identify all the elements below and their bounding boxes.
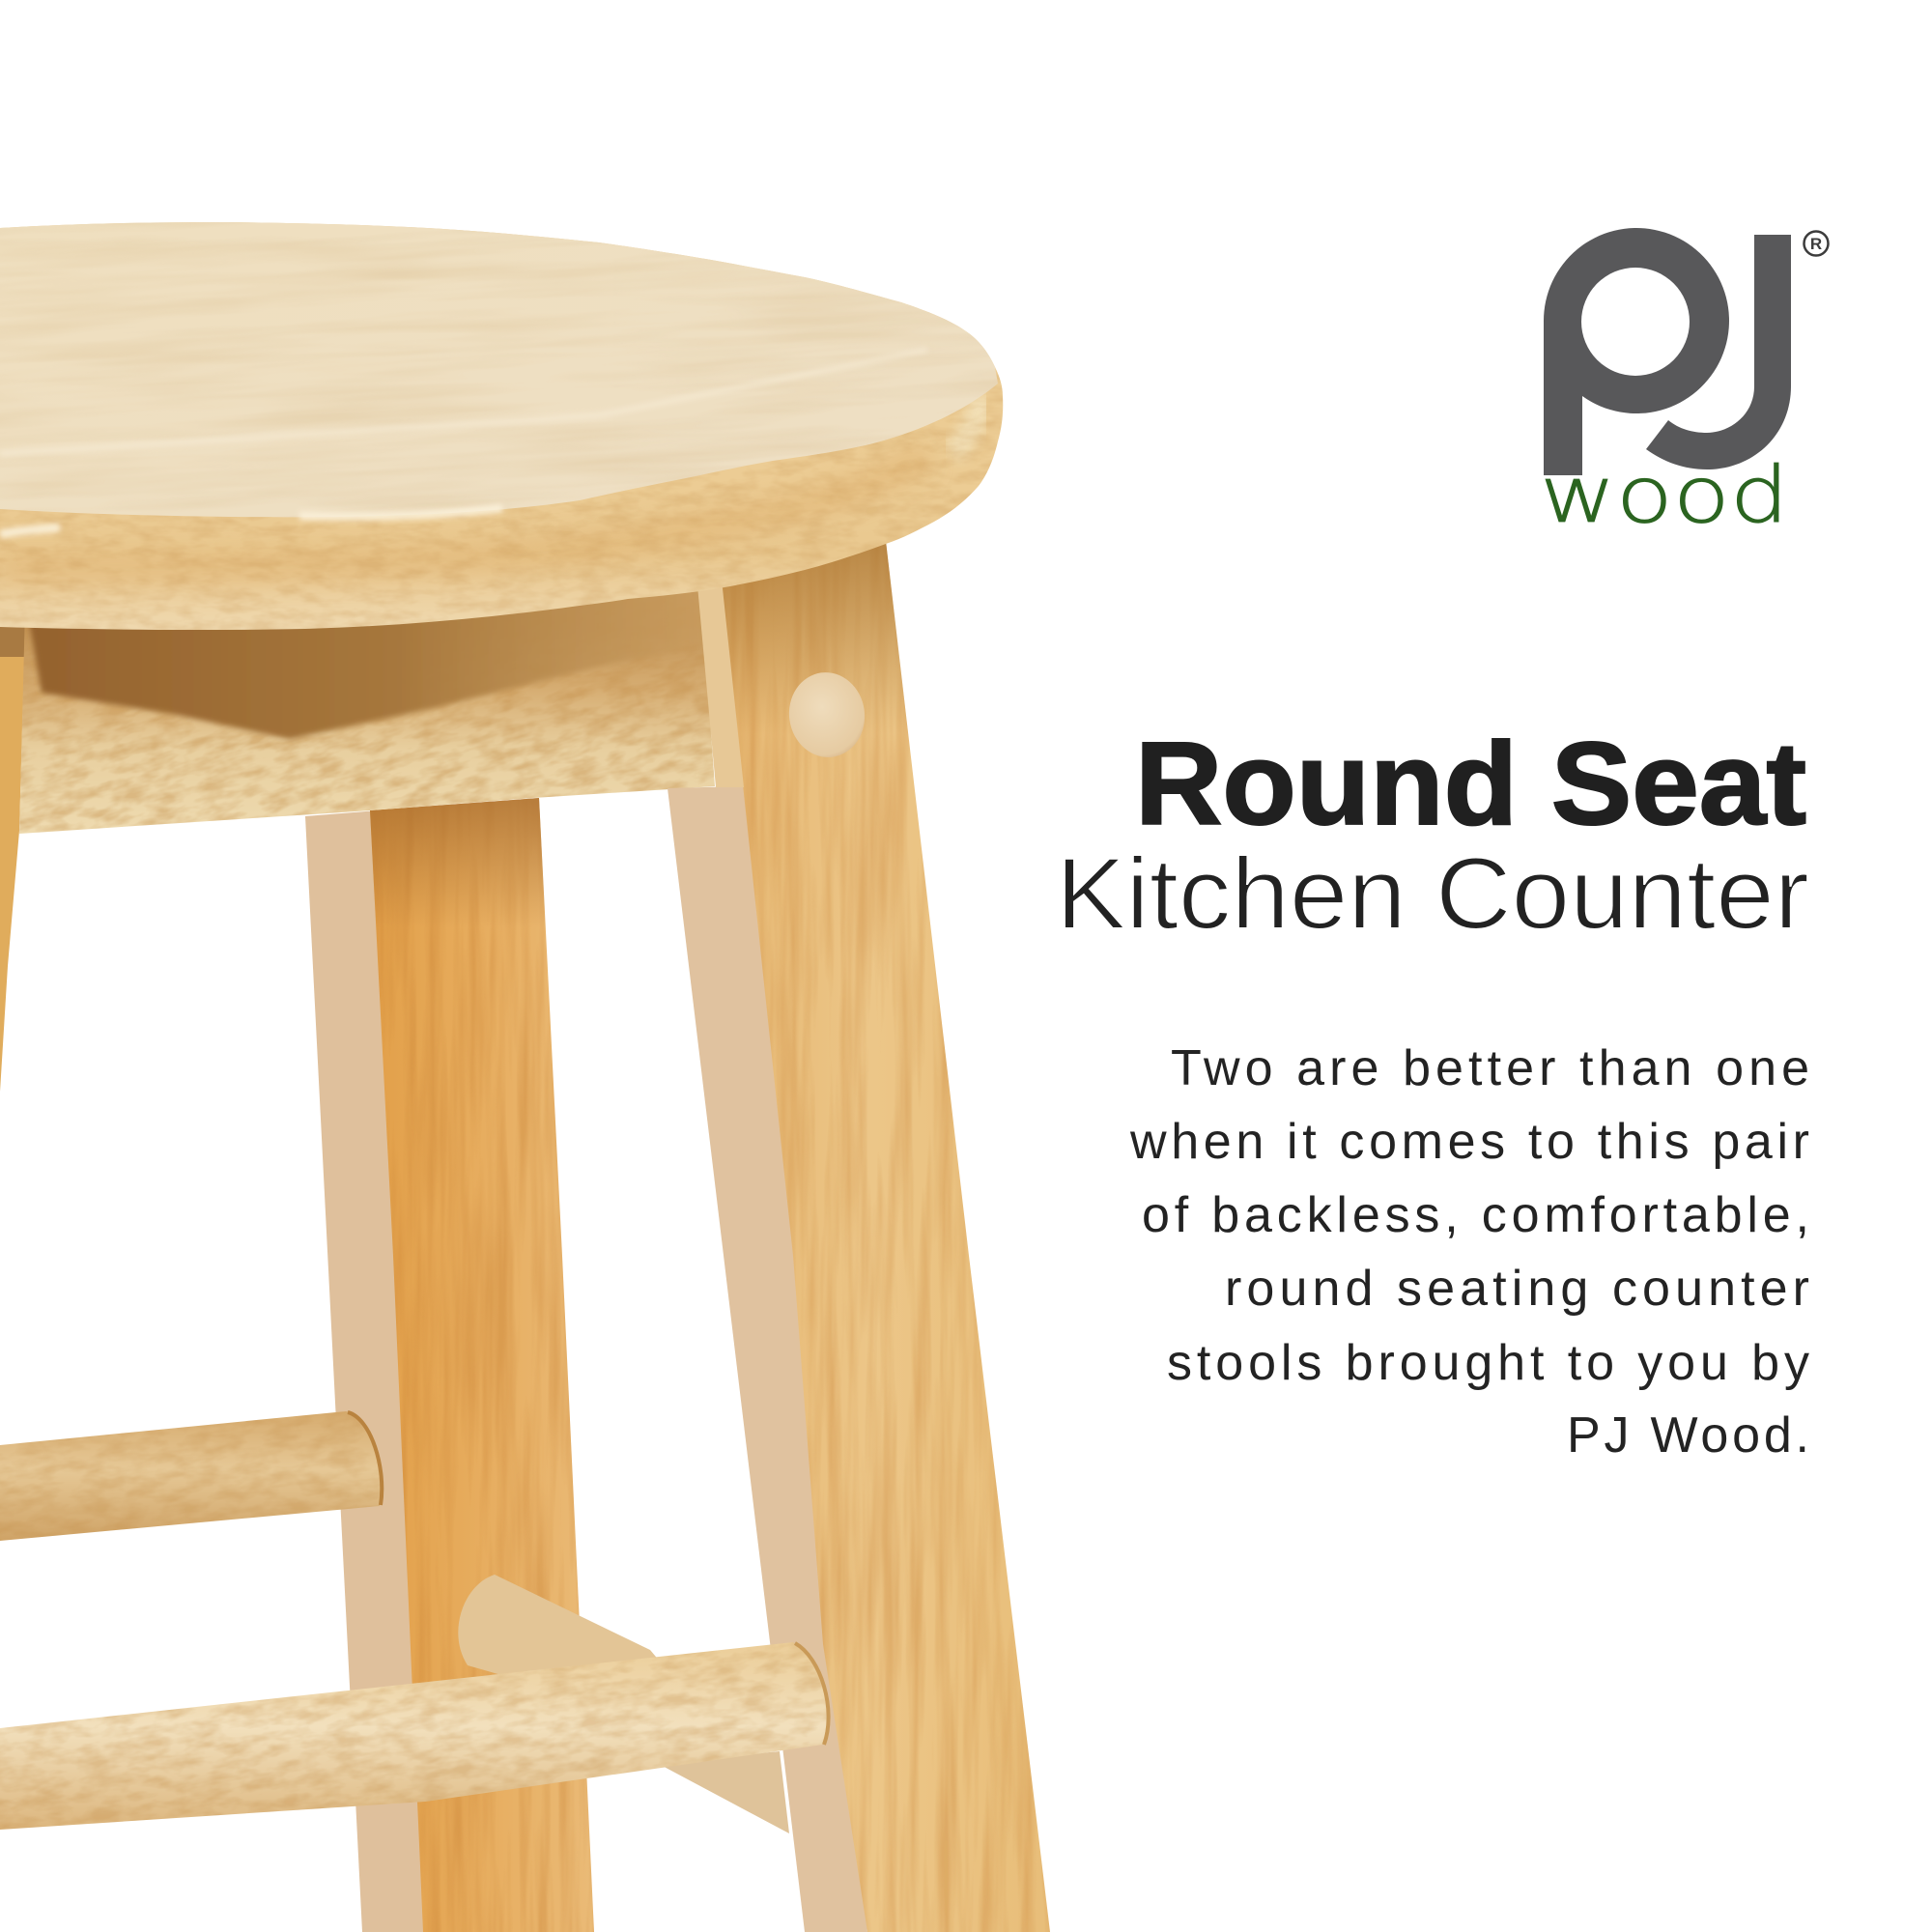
back left leg: orange front — [367, 792, 599, 1932]
back left leg: shaded side — [305, 810, 425, 1932]
description text — [1129, 1040, 1809, 1463]
logo: pj wood — [1540, 228, 1828, 540]
logo word wood: wood — [1540, 450, 1789, 540]
logo mark j — [1646, 235, 1791, 469]
front right leg: shaded side — [668, 786, 867, 1932]
description text: of backless, comfortable, — [1142, 1187, 1809, 1243]
description text: when it comes to this pair — [1129, 1114, 1809, 1170]
far left leg sliver — [0, 618, 25, 1092]
heading line: Kitchen Counter: Kitchen Counter — [1056, 838, 1809, 951]
apron under the seat — [19, 591, 715, 834]
lower front rail — [0, 1550, 871, 1908]
heading line: Round Seat: Round Seat — [1135, 718, 1806, 849]
seat edge highlights — [0, 508, 502, 534]
joint strip between apron and leg — [697, 580, 744, 787]
logo mark p — [1544, 228, 1729, 475]
description text: PJ Wood. — [1567, 1407, 1809, 1463]
round seat top surface — [0, 222, 998, 517]
description text: Two are better than one — [1171, 1040, 1809, 1096]
registered mark: R — [1810, 235, 1822, 253]
registered mark — [1804, 232, 1828, 255]
description text: stools brought to you by — [1167, 1335, 1809, 1391]
seat rim shading — [0, 367, 1024, 638]
back rail dowel — [458, 1575, 676, 1700]
upper left rail — [0, 1360, 414, 1596]
dowel peg on leg — [783, 668, 870, 762]
stool photo illustration — [0, 133, 1093, 1932]
round seat rim — [0, 222, 1003, 630]
front right leg: front face — [715, 531, 1063, 1932]
back rail behind stool — [657, 1751, 789, 1833]
seat wood grain — [0, 133, 1093, 608]
heading — [1056, 718, 1809, 951]
description text: round seating counter — [1225, 1261, 1809, 1317]
